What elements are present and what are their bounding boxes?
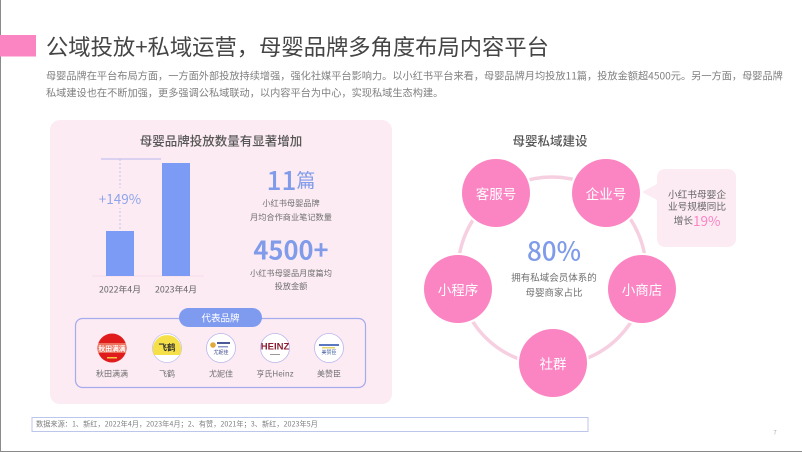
- node: customer service: [462, 159, 530, 227]
- node: small shop: [608, 255, 676, 323]
- callout: 小红书母婴企: [668, 187, 726, 201]
- logo: Unicharm: [206, 334, 236, 380]
- bar chart: [92, 159, 204, 296]
- logo: Unicharm: 尤妮佳: [213, 349, 229, 356]
- node: enterprise account: 企业号: [586, 183, 626, 203]
- callout: [642, 169, 736, 247]
- title marker: [0, 35, 36, 56]
- brands pill: 代表品牌: [201, 310, 240, 324]
- center stat: 80%: [527, 232, 581, 268]
- center stat: 拥有私域会员体系的: [511, 270, 597, 284]
- logo: Heinz: [256, 334, 294, 380]
- intro text: [46, 68, 783, 100]
- logo: Mead Johnson: 美赞臣: [321, 349, 337, 356]
- intro text: 母婴品牌在平台布局方面，一方面外部投放持续增强，强化社媒平台影响力。以小红书平台来看，母婴品牌月均投放11篇，投放金额超4500元。另一方面，母婴品牌: [46, 68, 783, 82]
- node: community: [519, 329, 587, 397]
- stat: monthly spend: 小红书母婴品月度篇均: [250, 267, 332, 279]
- logo: Akita: 秋田满满: [96, 368, 128, 380]
- logo: Akita: 秋田满满: [98, 343, 126, 353]
- data source: 数据来源：1、新红，2022年4月，2023年4月；2、有赞，2021年；3、新红，2023年5月: [36, 420, 318, 430]
- logo: Mead Johnson: 美赞臣: [317, 368, 341, 380]
- node: small shop: 小商店: [622, 279, 662, 299]
- data source: [32, 418, 588, 432]
- panel heading: 母婴品牌投放数量有显著增加: [140, 130, 302, 150]
- logo: Unicharm: 尤妮佳: [209, 368, 233, 380]
- ring diagram: [424, 159, 676, 397]
- node: customer service: 客服号: [476, 183, 516, 203]
- stat: monthly spend: 投放金额: [275, 280, 307, 292]
- center stat: [511, 232, 597, 299]
- node: community: 社群: [540, 353, 567, 373]
- logo: Mead Johnson: [314, 334, 344, 380]
- brands pill: [179, 308, 262, 327]
- stat: monthly spend: 4500+: [253, 230, 329, 268]
- logo: Feihe: [152, 334, 182, 380]
- callout: 业号规模同比: [668, 199, 726, 213]
- page number: 7: [773, 428, 777, 436]
- intro text: 私域建设也在不断加强，更多强调公私域联动，以内容平台为中心，实现私域生态构建。: [46, 84, 443, 100]
- stat: monthly notes: 月均合作商业笔记数量: [250, 211, 332, 223]
- stat: monthly notes: 小红书母婴品牌: [262, 197, 320, 209]
- bar chart: +149%: [99, 188, 141, 208]
- private domain heading: 母婴私域建设: [512, 130, 588, 150]
- center stat: 母婴商家占比: [525, 285, 583, 299]
- bar chart: 2022年4月: [99, 282, 141, 296]
- logo: Heinz: HEINZ: [261, 342, 289, 352]
- representative brands box: [76, 308, 366, 388]
- node: mini program: 小程序: [438, 279, 478, 299]
- logo: Feihe: 飞鹤: [159, 368, 175, 380]
- panel: brand placement: [50, 120, 392, 404]
- node: mini program: [424, 255, 492, 323]
- bar chart: 2023年4月: [155, 282, 197, 296]
- logo: Akita: [96, 334, 128, 380]
- callout: 增长19%: [674, 210, 720, 230]
- stat: monthly spend: [250, 230, 332, 292]
- stat: monthly notes: [250, 160, 332, 223]
- stat: monthly notes: 11篇: [267, 160, 315, 198]
- title: 公域投放+私域运营，母婴品牌多角度布局内容平台: [46, 30, 549, 62]
- node: enterprise account: [572, 159, 640, 227]
- logo: Feihe: 飞鹤: [158, 342, 176, 354]
- logo: Heinz: 亨氏Heinz: [256, 368, 294, 380]
